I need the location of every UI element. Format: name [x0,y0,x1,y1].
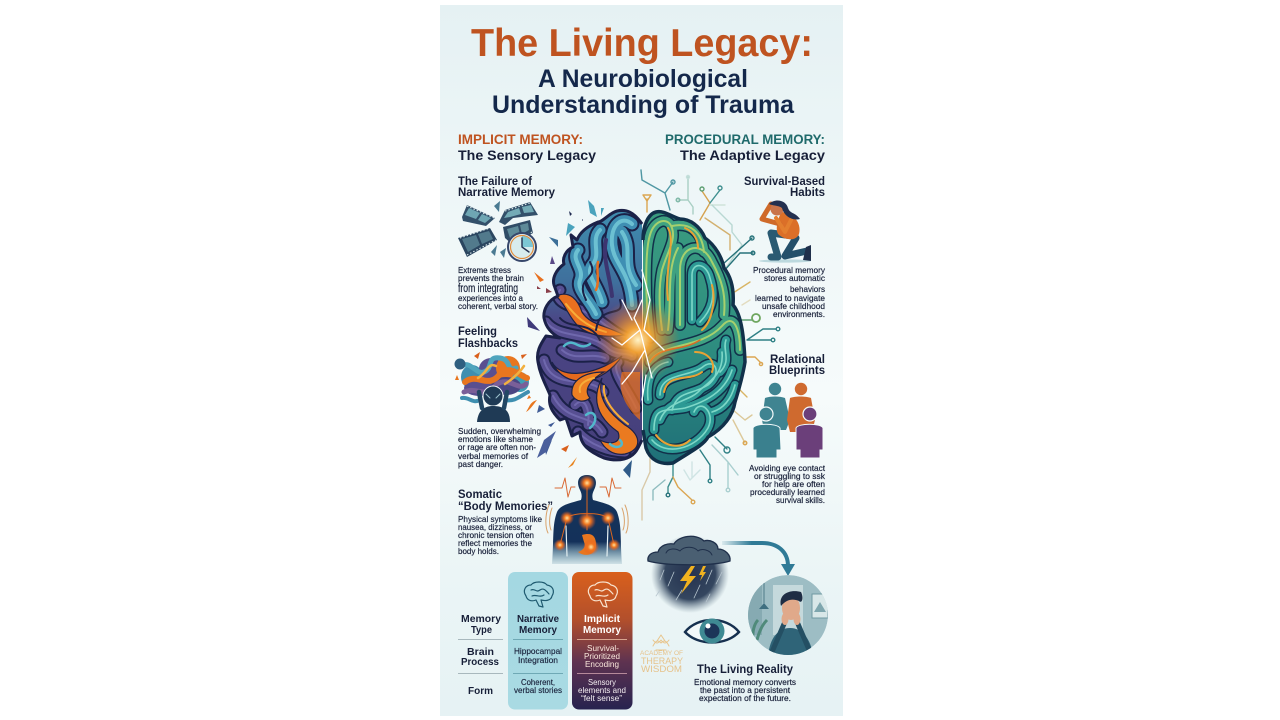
logo: academy of therapy wisdom [640,635,683,674]
icon: brain outline light [588,582,617,607]
form value [578,677,626,703]
circuit lines around right hemisphere [641,170,780,520]
right column heading [665,132,826,163]
brain process value: Hippocampal [514,646,562,656]
body text [458,265,538,311]
body text: the past into a persistent [700,685,791,695]
logo wordmark: THERAPY [641,656,683,666]
body text: Sudden, overwhelming [458,426,541,436]
body text: expectation of the future. [699,693,791,703]
row labels: Brain [467,646,494,658]
form value: elements and [578,685,626,695]
block: survival-based habits [744,176,826,319]
implicit heading two: Memory [583,624,621,636]
subtitle line two: A Neurobiological [538,65,748,93]
implicit heading: Implicit [584,613,620,625]
body text: learned to navigate [755,293,825,303]
body text: environments. [773,309,825,319]
body text: Emotional memory converts [694,677,796,687]
icon: rain under storm cloud [651,535,729,613]
narrative heading: Narrative [517,613,559,625]
icon: broken film strip and clock [458,201,538,261]
block: relational blueprints [749,354,826,505]
brain process value: Integration [518,655,558,665]
logo wordmark: WISDOM [641,664,682,674]
body text: chronic tension often [458,530,534,540]
block: somatic body memories [458,475,628,564]
procedural memory label: PROCEDURAL MEMORY: [665,132,825,147]
narrative heading two: Memory [519,624,557,636]
brain illustration [530,205,750,467]
body text: from integrating [458,283,518,295]
heading: The Failure of [458,176,532,188]
brain process value [514,646,562,665]
body text [694,677,796,703]
row labels: Form [468,685,493,697]
body text: body holds. [458,546,499,556]
body text: verbal memories of [458,451,529,461]
body text: experiences into a [458,293,523,303]
block: failure of narrative memory [458,176,556,311]
brain process value: Prioritized [584,651,620,661]
row labels [458,613,503,697]
right hemisphere: pathways [640,205,750,467]
storm to reality illustration [648,535,828,703]
icon: brain outline [524,582,553,607]
logo wordmark [640,650,683,674]
heading line two: Habits [790,187,825,199]
form value: verbal stories [514,685,562,695]
heading line two: Flashbacks [458,338,518,350]
form value: Coherent, [521,677,555,687]
lightning crack [612,270,664,400]
body text: survival skills. [776,495,825,505]
poster background [440,5,843,716]
central glow [596,298,680,382]
arrow: storm to reality [722,543,795,576]
icon: storm cloud [648,536,730,565]
body text: or struggling to ssk [754,471,826,481]
icon: head with emotion cloud [454,352,531,422]
heading: Somatic [458,489,503,501]
sensory legacy label: The Sensory Legacy [458,148,597,163]
brain process value: Survival- [587,643,619,653]
panel: narrative memory [508,572,568,710]
icon: kneeling woman [759,201,811,263]
subtitle line three: Understanding of Trauma [492,91,795,119]
implicit memory label: IMPLICIT MEMORY: [458,132,583,147]
heading line two: Blueprints [769,365,825,377]
brain process value [584,643,620,669]
comparison table [458,572,632,710]
form value: “felt sense” [581,693,622,703]
adaptive legacy label: The Adaptive Legacy [680,148,826,163]
body text: stores automatic [764,273,826,283]
block: feeling flashbacks [454,326,541,469]
body text: procedurally learned [750,487,825,497]
body text: emotions like shame [458,434,533,444]
title [471,22,813,119]
body text: for help are often [762,479,825,489]
body text: Extreme stress [458,265,511,275]
logo wordmark: ACADEMY OF [640,650,683,657]
body text: prevents the brain [458,273,524,283]
body text [749,463,826,505]
body text: unsafe childhood [762,301,825,311]
body text: coherent, verbal story. [458,301,538,311]
body text: or rage are often non- [458,442,536,452]
icon: eye [685,618,739,644]
body text: nausea, dizziness, or [458,522,532,532]
left column heading [458,132,597,163]
body text: past danger. [458,459,503,469]
row labels: Memory [461,613,501,625]
body text [753,265,826,319]
logo mark [653,635,669,650]
row labels: Process [461,656,499,668]
heading: Feeling [458,326,497,338]
row labels: Type [471,624,492,636]
heading line two: “Body Memories” [458,501,553,513]
panel: implicit memory [572,572,632,710]
body text: Physical symptoms like [458,514,542,524]
body text: Avoiding eye contact [749,463,826,473]
body text: reflect memories the [458,538,532,548]
brain process value: Encoding [585,659,619,669]
heading: Survival-Based [744,176,825,188]
icon: glowing body [546,475,628,564]
heading: Relational [770,354,825,366]
body text [458,426,541,469]
icon: anxious man in room [748,575,828,660]
body text: behaviors [790,284,825,294]
heading line two: Narrative Memory [458,187,556,199]
form value: Sensory [588,677,617,687]
left hemisphere: flames [530,205,645,465]
icon: four people [753,383,823,458]
body text: Procedural memory [753,265,826,275]
heading: the living reality: The Living Reality [697,664,794,676]
body text [458,514,542,556]
shards around the brain [526,200,632,478]
title line one: The Living Legacy: [471,22,813,65]
form value [514,677,562,695]
